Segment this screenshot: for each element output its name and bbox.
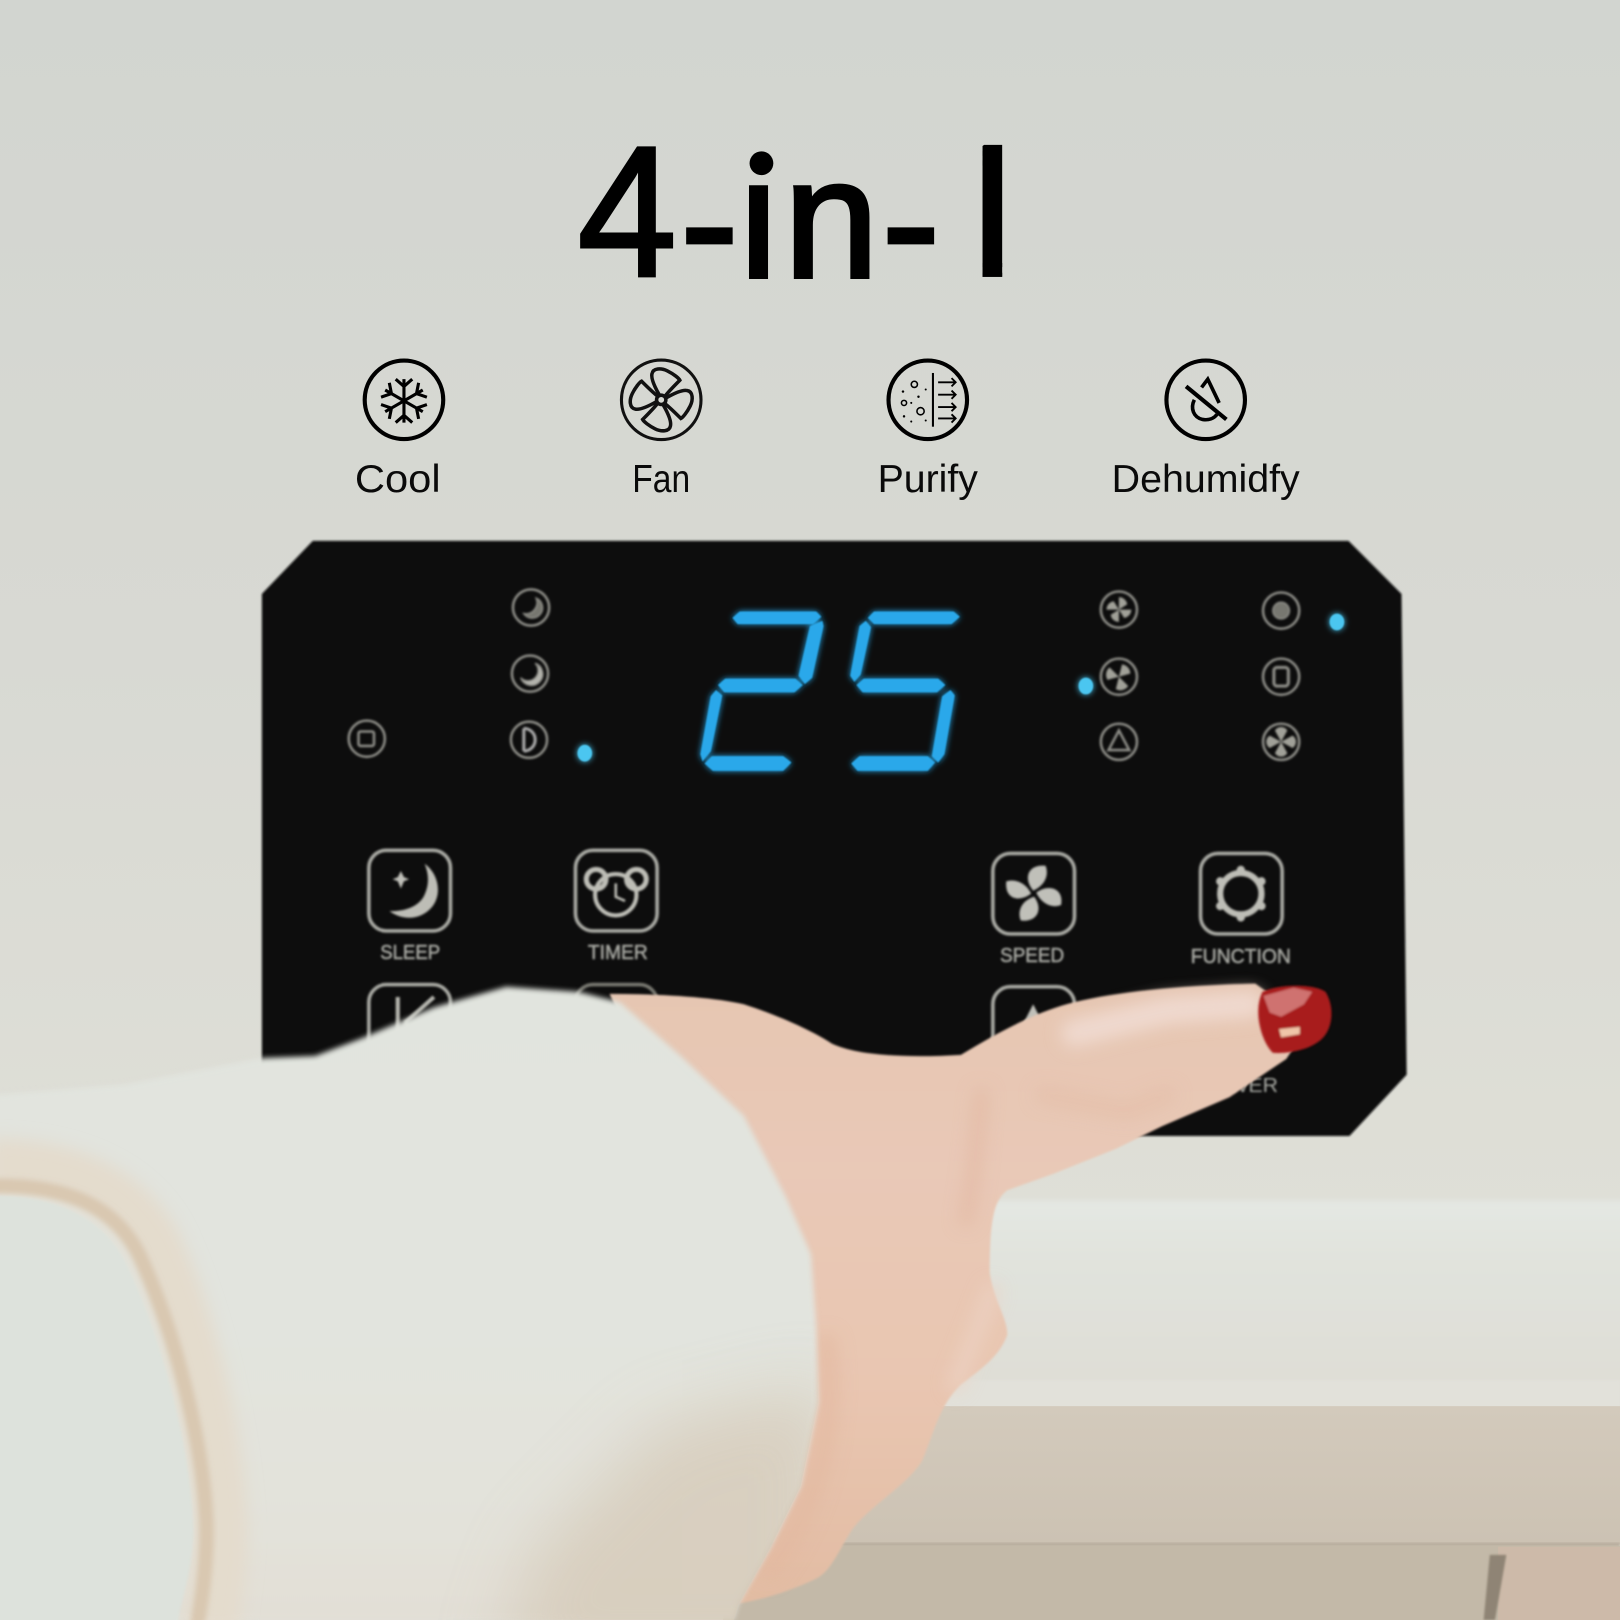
title: n xyxy=(784,124,878,313)
label: Cool: Cool xyxy=(355,457,441,501)
label: Dehumidfy: Dehumidfy xyxy=(1112,457,1300,501)
label: Purify: Purify xyxy=(878,457,978,501)
title xyxy=(580,144,1002,279)
button: speed xyxy=(993,853,1074,967)
button: sleep: SLEEP xyxy=(380,941,440,964)
button: timer xyxy=(575,850,657,964)
button: timer: TIMER xyxy=(588,941,648,964)
icon: dehumidify crossed droplet xyxy=(1166,361,1245,439)
button: speed: SPEED xyxy=(1000,944,1064,967)
lower buttons, partly hidden by the hand xyxy=(369,985,1278,1097)
beige shadow on sleeve xyxy=(496,1384,827,1620)
title: 4 xyxy=(578,108,677,316)
red fingernail xyxy=(1258,986,1331,1053)
white sweater sleeve xyxy=(0,987,827,1620)
title: - xyxy=(680,122,739,321)
title: 1 xyxy=(939,109,1038,317)
button: sleep xyxy=(369,850,450,964)
temperature display: 25 xyxy=(700,612,960,771)
indicator lights xyxy=(578,614,1344,761)
title: - xyxy=(881,122,940,321)
small status icons xyxy=(349,589,1299,760)
icon: purify filter xyxy=(889,361,967,439)
icon: cool snowflake xyxy=(365,361,443,439)
hand pressing the panel xyxy=(610,984,1331,1603)
lower buttons, partly hidden by the hand: POWER xyxy=(1197,1074,1278,1097)
button: function: FUNCTION xyxy=(1191,945,1291,968)
icon: fan xyxy=(621,360,701,440)
finger highlights and shading xyxy=(770,1004,1250,1570)
control panel xyxy=(262,541,1406,1135)
title: i xyxy=(740,124,777,313)
label: Fan: Fan xyxy=(632,457,690,501)
sleeve cuff xyxy=(0,1165,221,1620)
button: function xyxy=(1191,853,1291,968)
